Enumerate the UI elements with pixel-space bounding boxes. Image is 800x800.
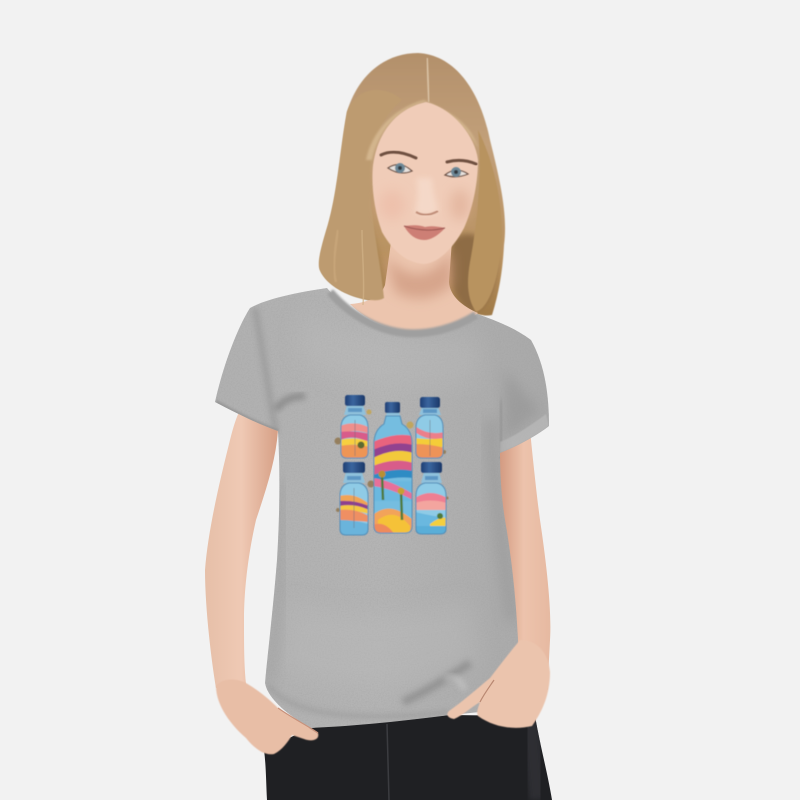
nose: [415, 178, 438, 215]
bottle: top right: [415, 397, 445, 460]
bottle: bottom right: [415, 462, 447, 535]
right hand: [447, 640, 550, 728]
jeans: [264, 715, 552, 800]
splatter: [334, 410, 448, 512]
hair front strands: [319, 58, 502, 312]
neck shadow: [385, 250, 452, 299]
hair back: [319, 53, 505, 316]
collar: [330, 292, 476, 333]
bottle: bottom left: [339, 462, 369, 536]
t-shirt: [215, 288, 549, 728]
eyes: [388, 163, 468, 177]
bottle: centre tall: [373, 402, 413, 535]
print: water bottles: [334, 395, 448, 536]
left arm: [205, 410, 278, 688]
bottle: top left: [340, 395, 370, 460]
neck and chest: [350, 235, 478, 333]
left hand: [216, 680, 318, 754]
eyebrows: [381, 152, 476, 164]
face: [372, 102, 478, 264]
mouth: [404, 225, 445, 240]
right arm: [497, 430, 550, 690]
